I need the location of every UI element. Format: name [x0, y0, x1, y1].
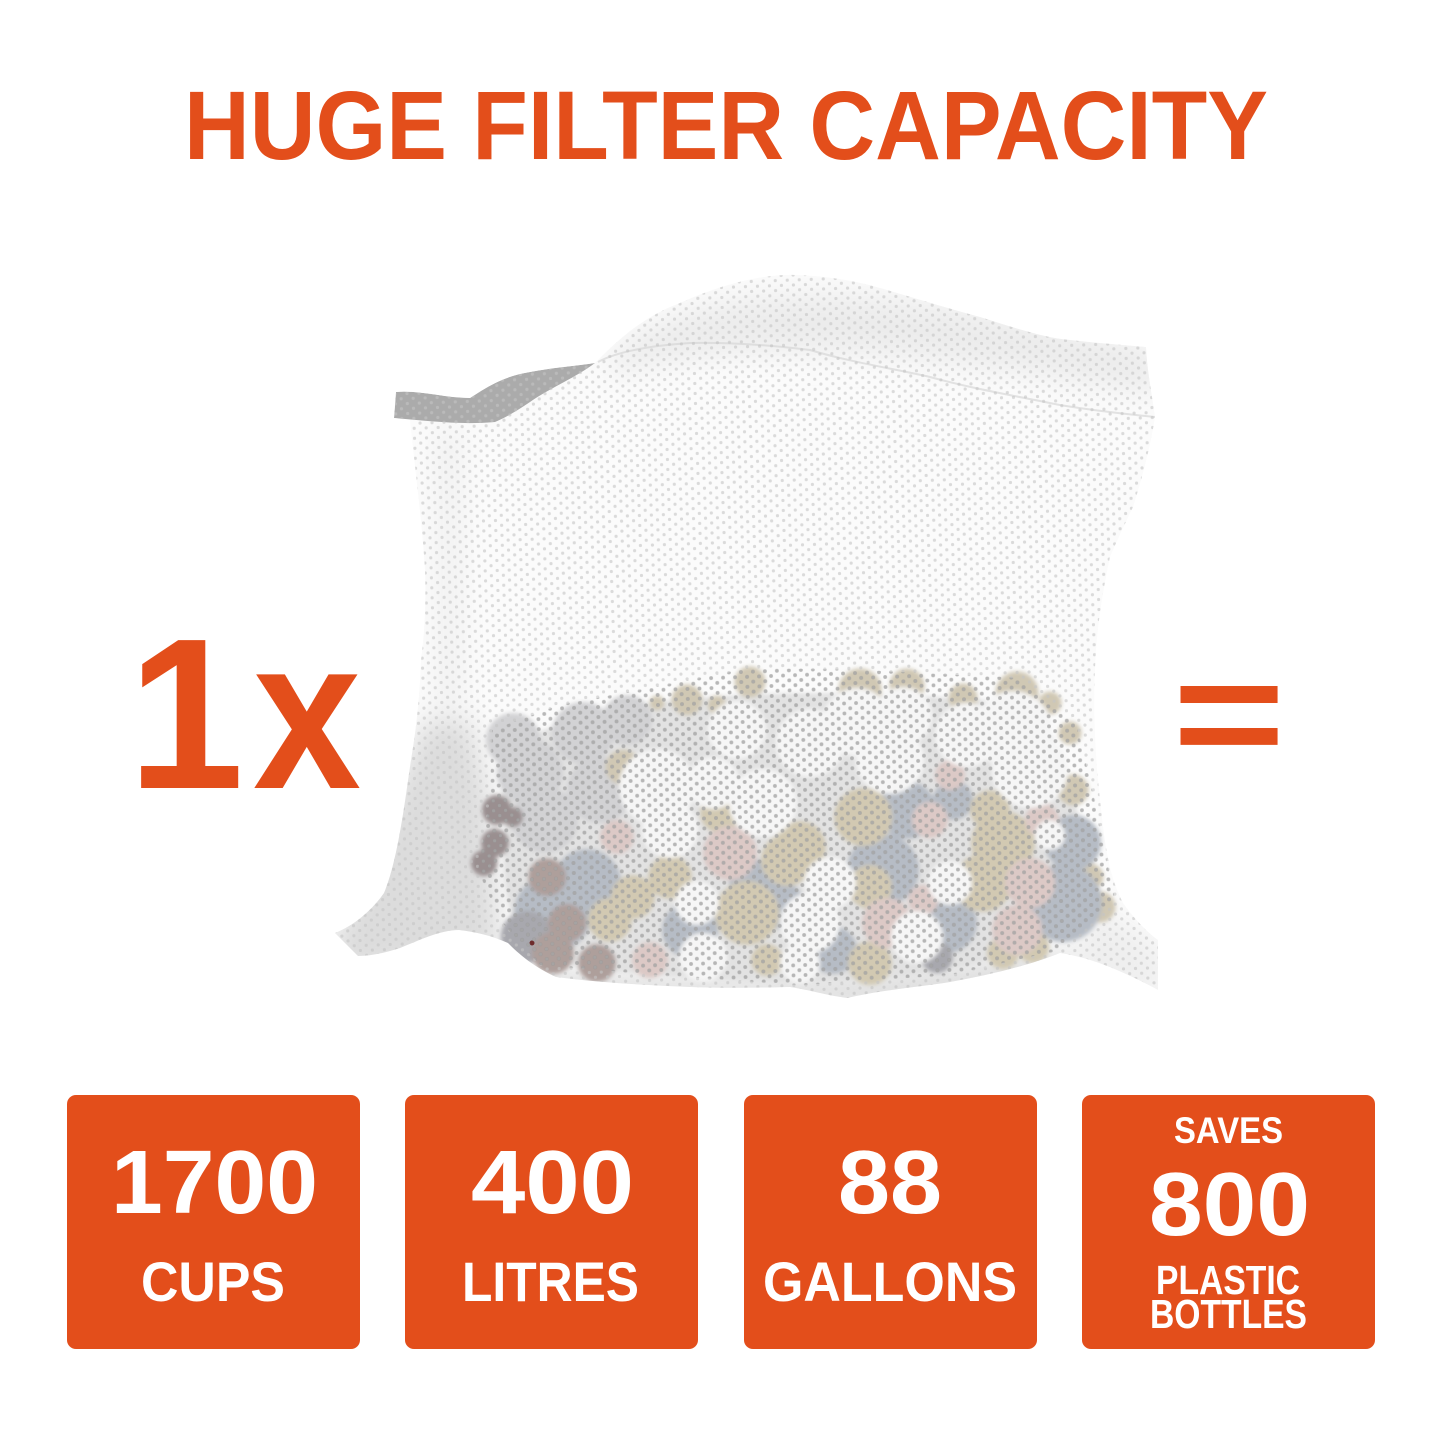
stat box: 400 litres: LITRES — [462, 1250, 639, 1313]
bead cluster base — [500, 693, 1090, 982]
stat box: saves 800 plastic bottles: 800 — [1149, 1155, 1310, 1255]
dark top flap — [394, 363, 595, 423]
inner rim fold — [598, 343, 1155, 417]
stat box: 400 litres — [405, 1095, 698, 1349]
stat box: 88 gallons: GALLONS — [763, 1250, 1017, 1313]
stat box: 1700 cups: 1700 — [111, 1133, 318, 1233]
stat box: saves 800 plastic bottles: PLASTIC — [1156, 1257, 1300, 1303]
woven mesh overlay — [330, 270, 1170, 1000]
stat box: 88 gallons: 88 — [838, 1133, 942, 1233]
stat box: 400 litres: 400 — [471, 1133, 634, 1233]
stat box: saves 800 plastic bottles — [1082, 1095, 1375, 1349]
multiplier: 1x — [128, 593, 361, 834]
filter bag illustration — [320, 270, 1170, 1010]
bag body — [335, 275, 1158, 998]
multiplier: 1x: 1 — [128, 593, 244, 834]
multiplier: 1x: x — [253, 593, 361, 834]
stat box: 88 gallons — [744, 1095, 1037, 1349]
bag shading — [320, 294, 1165, 1010]
stat box: saves 800 plastic bottles: BOTTLES — [1150, 1291, 1307, 1337]
stat box: 1700 cups — [67, 1095, 360, 1349]
beads inside the bag — [471, 668, 1114, 982]
stat box: saves 800 plastic bottles: SAVES — [1174, 1110, 1283, 1151]
equals sign: = — [1172, 627, 1286, 801]
stat box: 1700 cups: CUPS — [141, 1250, 285, 1313]
title: HUGE FILTER CAPACITY — [184, 71, 1268, 180]
